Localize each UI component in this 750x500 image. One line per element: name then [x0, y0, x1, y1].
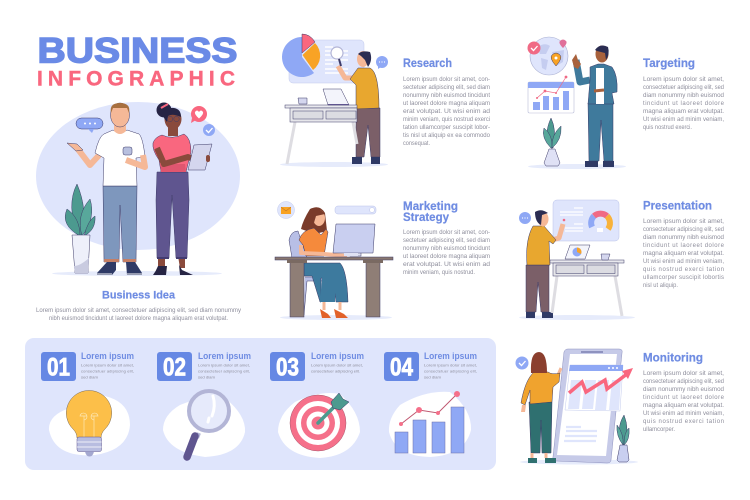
step 03: [270, 351, 364, 458]
chart card: [565, 365, 633, 411]
body text: consectetuer adipiscing elit, sed: [643, 379, 724, 385]
step 01: Lorem ipsum: [81, 351, 134, 361]
step 01: Lorem ipsum dolor sit amet,: [81, 362, 134, 368]
body text: nisl ut aliquip.: [643, 283, 678, 289]
body text: [643, 219, 725, 289]
body text: sectetuer adipiscing elit, sed diam: [403, 85, 490, 91]
body text: erat volutpat. Ut wisi enim ad: [403, 109, 490, 115]
heading: Targeting: [643, 58, 695, 70]
step 01: 01: [47, 354, 70, 382]
laptop: [565, 245, 590, 259]
donut chart: [591, 214, 610, 232]
search bar: [335, 206, 376, 214]
body text: Lorem ipsum dolor sit amet,: [643, 77, 724, 83]
step 02: 02: [163, 354, 186, 382]
monitor: [333, 224, 375, 256]
step 02: consectetuer adipiscing elit,: [198, 368, 250, 374]
body text: tis nisl ut aliquip ex ea commodo: [403, 133, 491, 139]
title: INFOGRAPHIC: [37, 68, 235, 90]
panel: monitoring illustration: [516, 349, 638, 464]
body text: consequat.: [403, 141, 430, 147]
body text: [643, 371, 725, 433]
body text: consectetuer adipiscing elit, sed: [643, 227, 724, 233]
panel: steps: [25, 338, 496, 470]
panel: monitoring text: [643, 352, 725, 433]
icon: pink pin: [559, 40, 567, 48]
body text: [643, 77, 725, 131]
title: BUSINESS: [38, 32, 238, 70]
panel: marketing strategy text: [403, 201, 490, 276]
icon: check badge: [528, 42, 540, 54]
icon: target: [278, 393, 360, 458]
step 01: consectetuer adipiscing elit,: [81, 368, 134, 374]
title: [37, 32, 238, 90]
woman: [153, 102, 212, 275]
cup: [298, 98, 307, 104]
laptop: [323, 89, 349, 105]
step 03: Lorem ipsum: [311, 351, 364, 361]
woman: [299, 207, 348, 318]
body text: quis nostrud exerci tation: [643, 419, 724, 425]
screen: [553, 200, 619, 241]
icon: speech bubble: [519, 212, 531, 224]
step 03: 03: [276, 354, 299, 382]
step 03: consectetuer adipiscing elit.: [311, 368, 360, 374]
step 04: [384, 351, 477, 457]
person: [526, 210, 565, 318]
icon: magnifier: [163, 391, 245, 457]
icon: speech bubble: [376, 56, 388, 69]
panel: marketing strategy illustration: [275, 202, 393, 320]
heading: Marketing: [403, 201, 458, 213]
icon: plant: [543, 118, 561, 166]
body text: ullamcorper suscipit lobortis: [643, 275, 724, 281]
phone: [553, 349, 622, 463]
man: [67, 103, 145, 275]
body text: ut laoreet dolore magna aliquam: [403, 101, 490, 107]
step 01: [41, 351, 134, 456]
body text: nonummy nibh euismod tincidunt: [403, 93, 490, 99]
body text: [403, 77, 491, 147]
heading: Presentation: [643, 200, 712, 212]
heading: Strategy: [403, 212, 450, 224]
body text: Lorem ipsum dolor sit amet,: [643, 371, 724, 377]
step 04: Lorem ipsum: [424, 351, 477, 361]
heading: business idea: Business Idea: [102, 290, 176, 302]
body text: tincidunt ut laoreet dolore: [643, 395, 725, 401]
body text: ullamcorper.: [643, 427, 675, 433]
heading: Monitoring: [643, 352, 703, 364]
desk: [275, 257, 393, 317]
icon: heart bubble: [191, 106, 207, 123]
body text: Lorem ipsum dolor sit amet,: [643, 219, 724, 225]
body text: diam nonummy nibh euismod: [643, 235, 724, 241]
body text: magna aliquam erat volutpat.: [643, 251, 724, 257]
step 04: consectetuer adipiscing elit,: [424, 368, 477, 374]
desk: [285, 105, 357, 164]
step 03: Lorem ipsum dolor sit amet,: [311, 362, 363, 368]
person: [572, 46, 617, 167]
cup: [601, 254, 610, 260]
panel: presentation illustration: [519, 200, 635, 320]
icon: mail bubble: [278, 202, 294, 218]
body text: erat volutpat. Ut wisi enim ad: [403, 262, 490, 268]
icon: magnifier: [331, 47, 343, 66]
icon: bar chart: [389, 391, 471, 457]
body text: minim veniam, quis nostrud.: [403, 270, 475, 276]
step 02: Lorem ipsum: [198, 351, 251, 361]
body text: quis nostrud exerci.: [643, 125, 692, 131]
panel: research illustration: [280, 34, 388, 167]
step 04: Lorem ipsum dolor sit amet,: [424, 362, 477, 368]
body text: tincidunt ut laoreet dolore: [643, 243, 725, 249]
desk: [550, 260, 624, 316]
step 02: Lorem ipsum dolor sit amet,: [198, 362, 250, 368]
body text: tincidunt ut laoreet dolore: [643, 101, 725, 107]
body text: minim veniam, quis nostrud exerci: [403, 117, 490, 123]
panel: presentation text: [643, 200, 725, 289]
pie chart: [282, 34, 320, 77]
panel: research text: [403, 58, 491, 147]
text: business idea: Lorem ipsum dolor sit amet, consectetuer adipiscing elit, sed diam nonummy: [36, 308, 241, 314]
body text: nonummy nibh euismod tincidunt: [403, 246, 490, 252]
step 01: sed diam: [81, 374, 99, 380]
icon: speech bubble: [76, 118, 103, 133]
screen: [289, 40, 364, 83]
panel: targeting text: [643, 58, 725, 131]
icon: plant: [617, 415, 629, 462]
icon: check badge: [203, 124, 215, 136]
heading: [403, 201, 458, 224]
chart card: [528, 76, 574, 113]
text: business idea: [36, 308, 241, 322]
heading: Research: [403, 58, 452, 70]
step 04: 04: [390, 354, 413, 382]
body text: Ut wisi enim ad minim veniam,: [643, 259, 724, 265]
panel: business idea illustration: [36, 102, 240, 276]
panel: targeting illustration: [528, 37, 626, 169]
icon: plant: [65, 184, 95, 273]
body text: magna aliquam erat volutpat.: [643, 109, 724, 115]
icon: light bulb: [49, 390, 130, 456]
body text: quis nostrud exerci tation: [643, 267, 724, 273]
body text: ut laoreet dolore magna aliquam: [403, 254, 490, 260]
body text: tation ullamcorper suscipit lobor-: [403, 125, 490, 131]
body text: sectetuer adipiscing elit, sed diam: [403, 238, 490, 244]
text: business idea: nibh euismod tincidunt ut laoreet dolore magna aliquam erat volutpat.: [49, 316, 228, 322]
step 04: sed diam: [424, 374, 442, 380]
icon: check badge: [516, 356, 528, 370]
body text: Ut wisi enim ad minim veniam,: [643, 117, 724, 123]
body text: [403, 230, 490, 276]
person: [338, 51, 380, 164]
body text: Ut wisi enim ad minim veniam,: [643, 411, 724, 417]
body text: Lorem ipsum dolor sit amet, con-: [403, 230, 490, 236]
icon: globe: [530, 37, 568, 75]
step 02: [157, 351, 251, 457]
body text: diam nonummy nibh euismod: [643, 387, 724, 393]
chair: [289, 231, 335, 315]
person: [521, 352, 561, 463]
icon: orange pin: [551, 53, 561, 66]
body text: diam nonummy nibh euismod: [643, 93, 724, 99]
body text: consectetuer adipiscing elit, sed: [643, 85, 724, 91]
step 02: sed diam: [198, 374, 216, 380]
body text: magna aliquam erat volutpat.: [643, 403, 724, 409]
body text: Lorem ipsum dolor sit amet, con-: [403, 77, 490, 83]
